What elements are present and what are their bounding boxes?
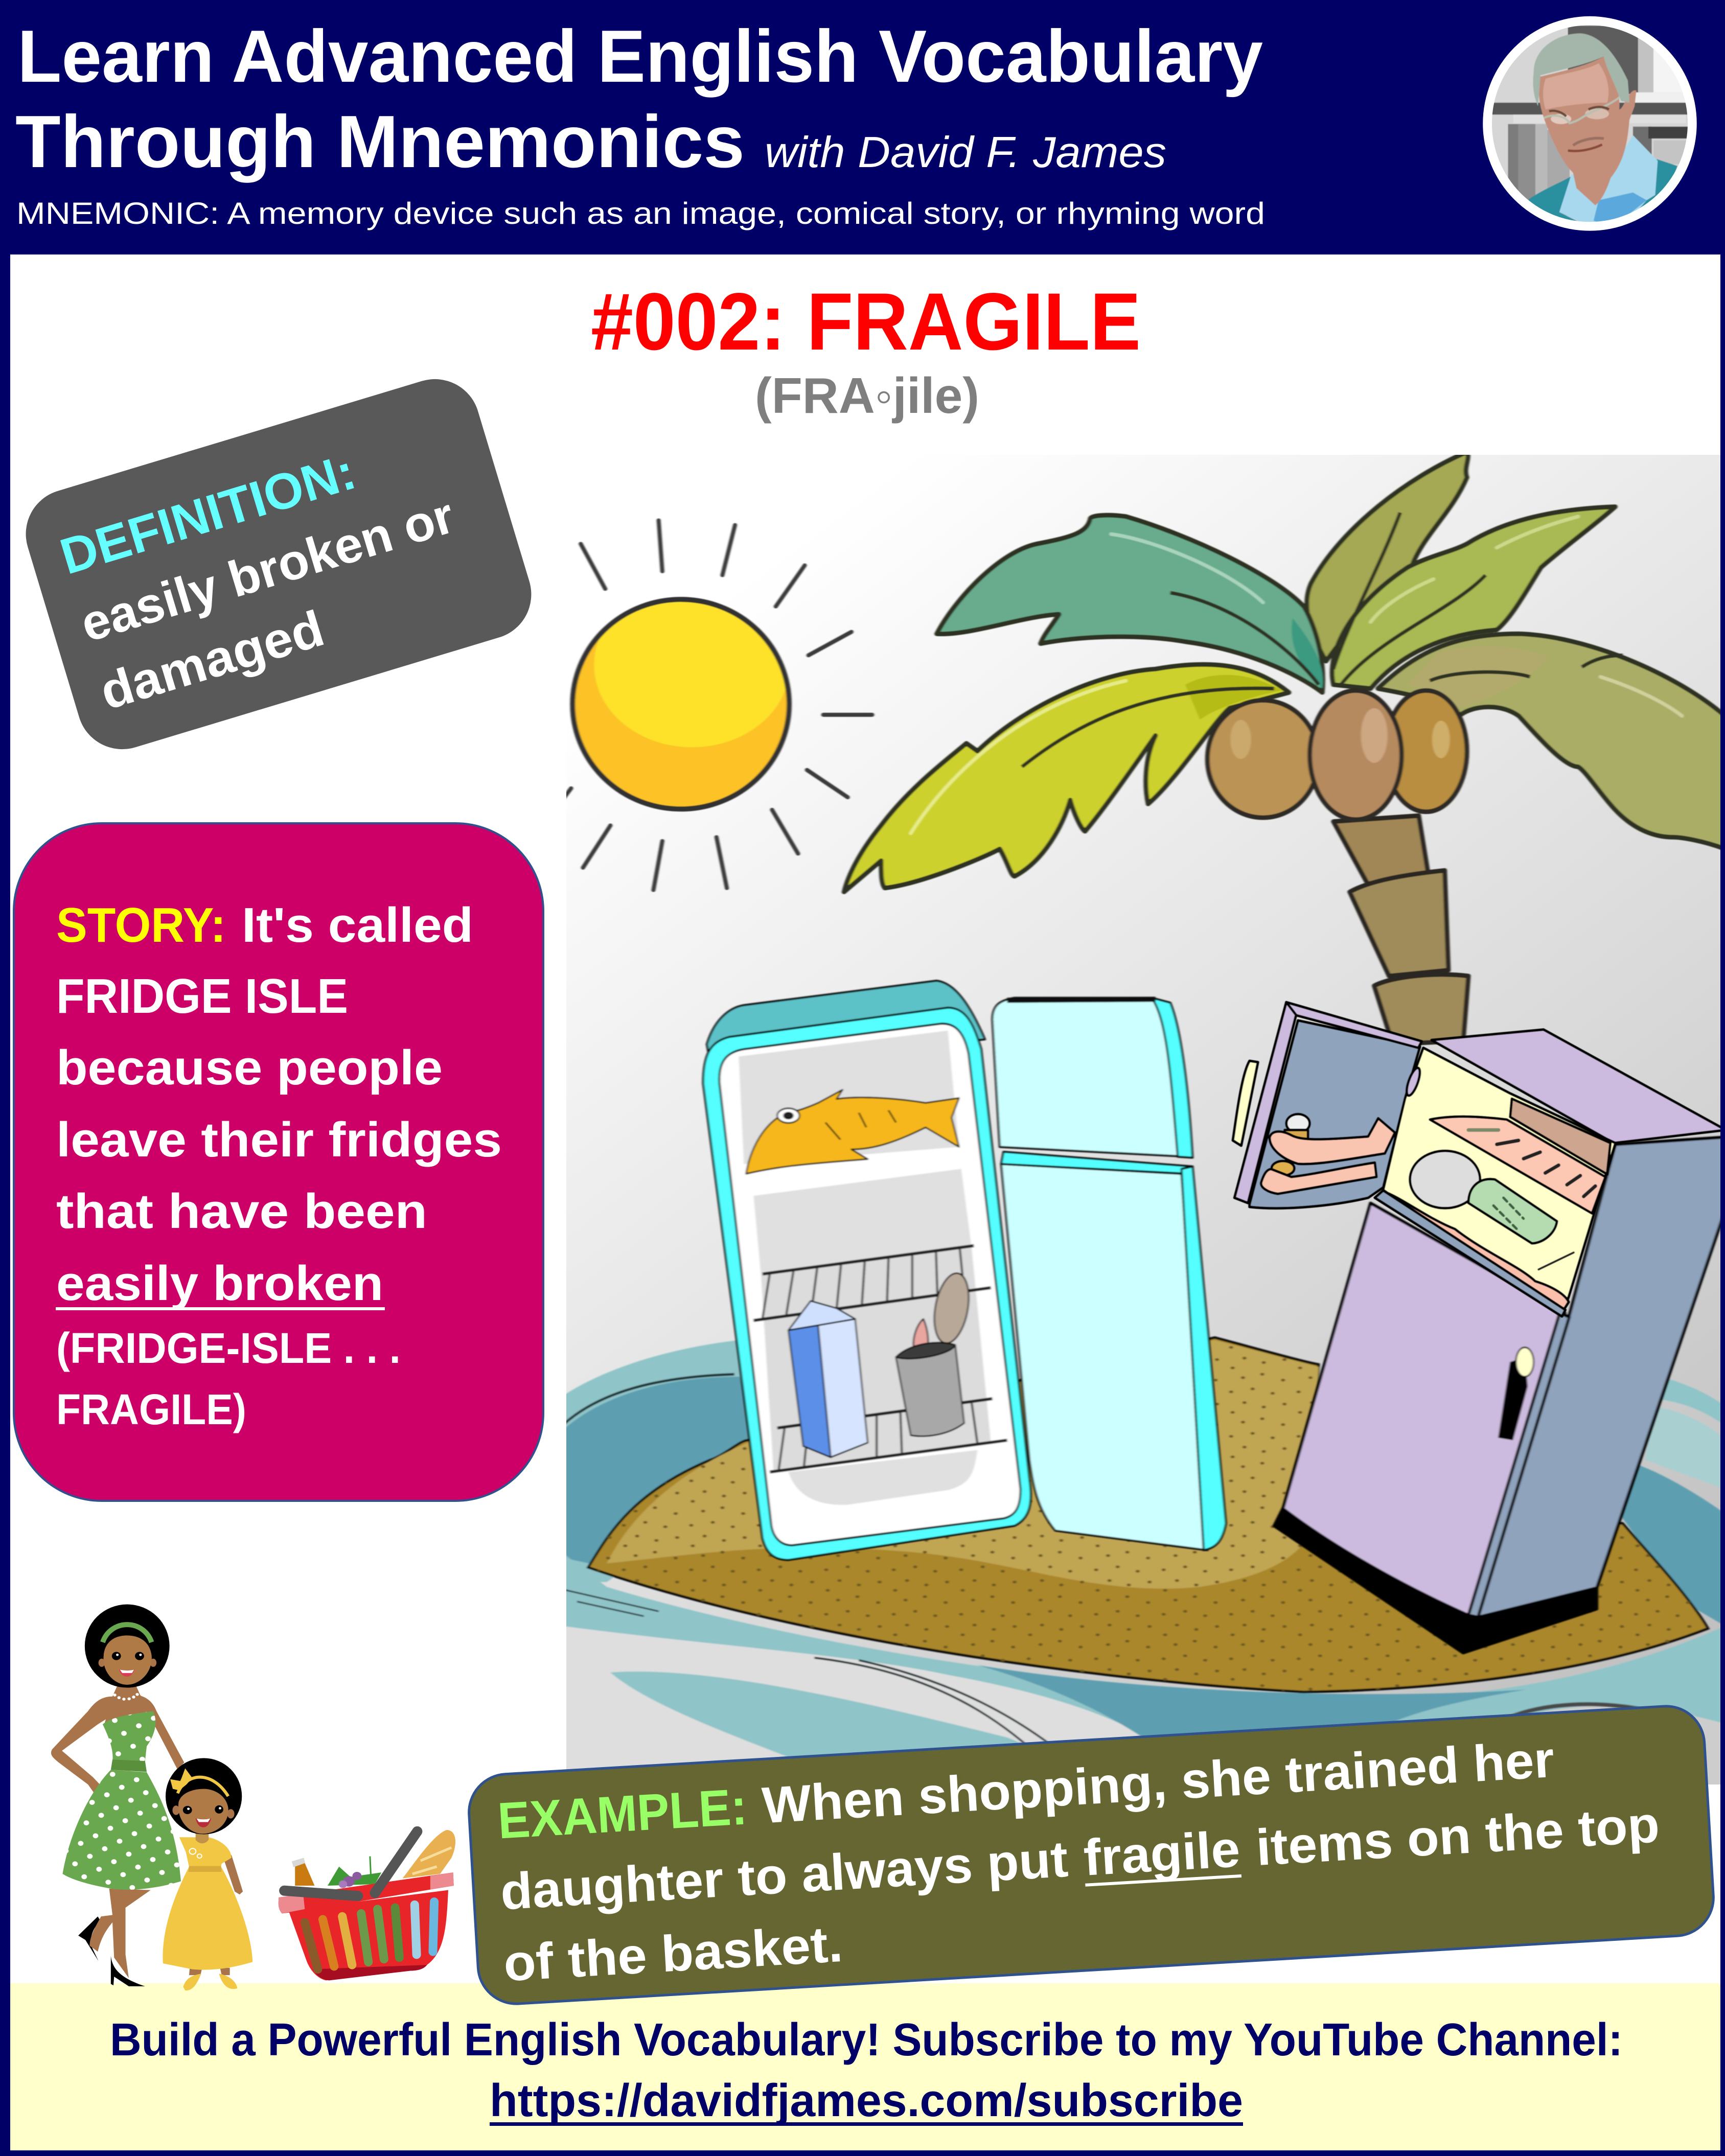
icon: shopping basket [279, 1830, 455, 1980]
story card [14, 823, 543, 1501]
panel: island illustration [562, 452, 1725, 1802]
footer call to action: Build a Powerful English Vocabulary! Subscribe to my YouTube Channel: [110, 2014, 1623, 2066]
wire racks [753, 1246, 1007, 1472]
story text: (FRIDGE-ISLE . . . [56, 1324, 401, 1372]
fish [746, 1089, 959, 1174]
icon: open teal fridge [703, 981, 1226, 1560]
story text: easily broken [56, 1256, 383, 1311]
definition card [15, 368, 542, 760]
example text: items on the top [1254, 1796, 1661, 1876]
can and spoon [896, 1272, 973, 1436]
pronunciation: (FRA◦jile) [755, 367, 979, 424]
trunk [1333, 816, 1468, 1045]
icon: sand island [588, 1337, 1708, 1692]
icon: palm tree [844, 452, 1725, 1045]
icon: leaning purple fridge [1274, 1137, 1725, 1653]
example text: When shopping, she trained her [761, 1731, 1556, 1834]
header title [15, 15, 1263, 183]
story text: FRAGILE) [56, 1385, 246, 1433]
icon: mother [51, 1605, 184, 1986]
example text: fragile [1082, 1820, 1241, 1887]
mnemonic definition line: MNEMONIC: A memory device such as an image, comical story, or rhyming word [16, 196, 1265, 230]
example card [467, 1704, 1716, 2006]
upper leaves [844, 452, 1725, 892]
milk carton [789, 1301, 868, 1457]
story text: leave their fridges [56, 1112, 502, 1167]
water and island [562, 1337, 1725, 1802]
definition text [73, 486, 481, 720]
footer band [10, 1983, 1720, 2150]
freezer door [993, 998, 1189, 1157]
footer link: https://davidfjames.com/subscribe [490, 2075, 1243, 2126]
story label: STORY: [56, 898, 226, 953]
icon: daughter [163, 1758, 252, 1990]
icon: author portrait [1482, 16, 1698, 233]
story text: that have been [56, 1184, 427, 1239]
definition label: DEFINITION: [54, 443, 362, 585]
fridge door [1001, 1164, 1207, 1550]
example label: EXAMPLE: [496, 1778, 749, 1850]
header byline: with David F. James [765, 128, 1166, 177]
icon: water [562, 1340, 1725, 1802]
icon: fridge interior and open freezer door [1233, 1002, 1725, 1316]
example text: daughter to always put [499, 1830, 1070, 1921]
coconuts [1207, 690, 1467, 820]
word title: #002: FRAGILE [591, 276, 1141, 367]
story text: It's called [242, 898, 473, 953]
example text [494, 1725, 1665, 1992]
story text: FRIDGE ISLE [56, 969, 348, 1024]
example text: of the basket. [502, 1915, 844, 1992]
definition text: easily broken or [74, 486, 461, 653]
definition text: damaged [94, 599, 330, 720]
story text: because people [56, 1040, 443, 1095]
icon: sun [562, 520, 872, 890]
header title: Through Mnemonics [15, 100, 745, 183]
header title: Learn Advanced English Vocabulary [17, 15, 1263, 98]
story text [56, 898, 502, 1433]
